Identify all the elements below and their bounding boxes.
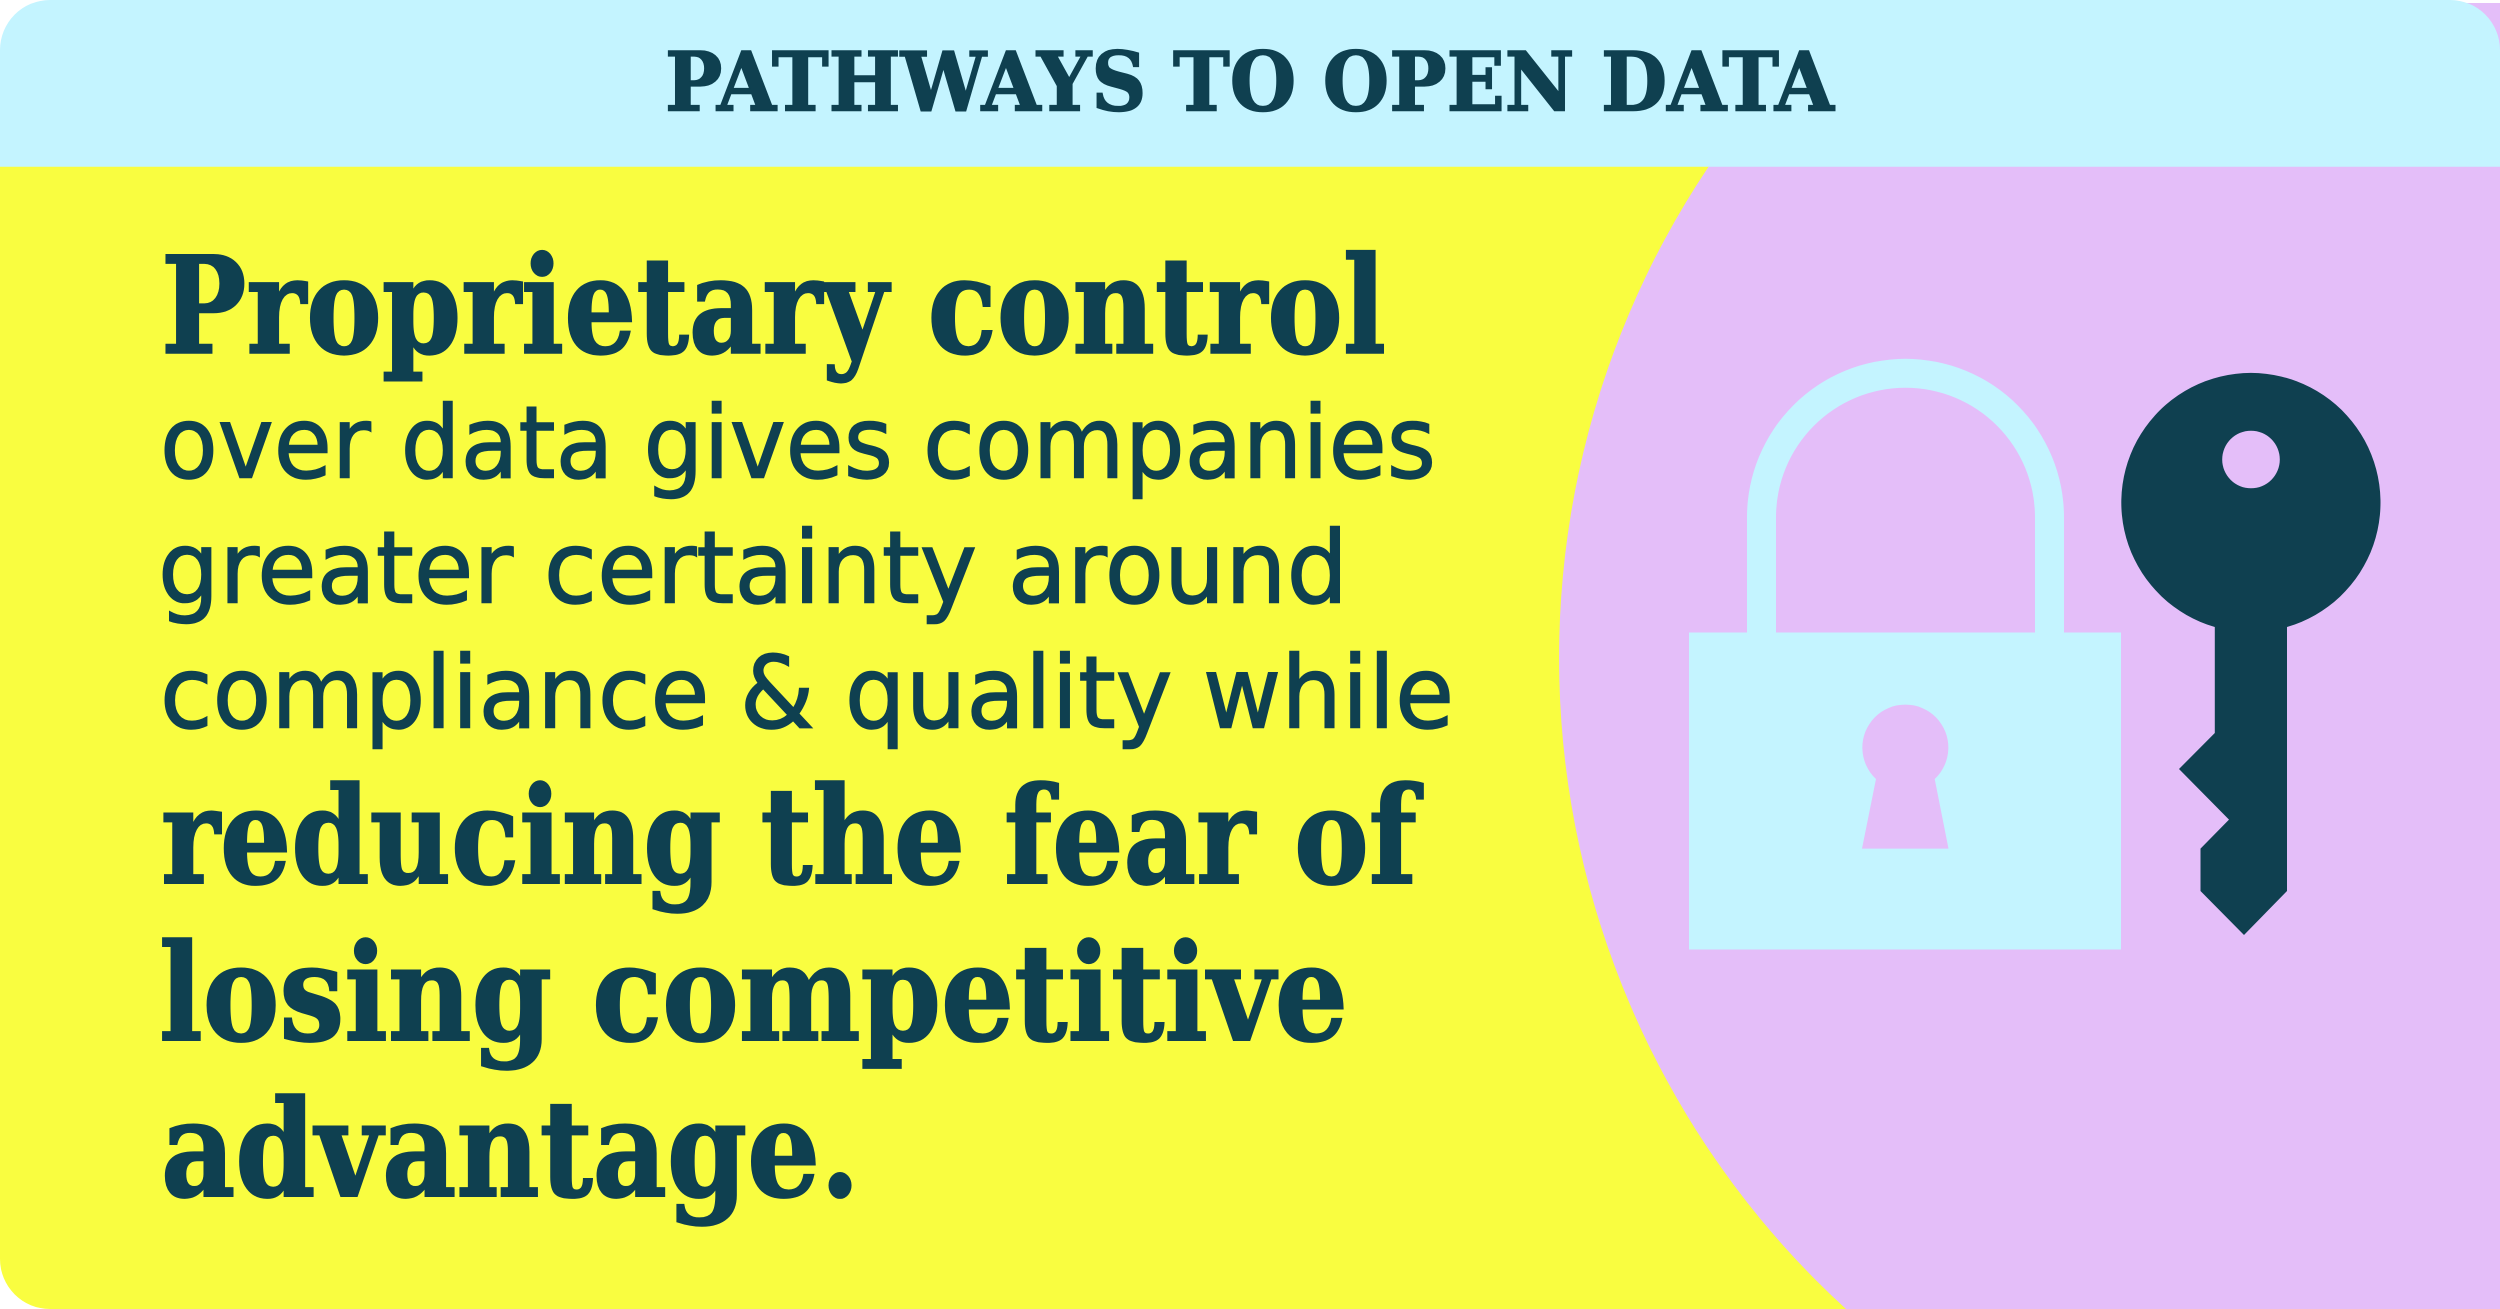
icon: padlock	[1689, 359, 2121, 949]
icon: key	[2121, 373, 2380, 935]
heading: proprietary control: Proprietary control	[161, 227, 1386, 385]
body line 3: compliance & quality while	[160, 635, 1454, 752]
emphasis line 3: advantage.	[161, 1070, 860, 1228]
panel: header band	[0, 0, 2500, 167]
panel: purple circle background	[1559, 3, 2500, 1309]
text block: main statement	[158, 227, 1454, 1228]
emphasis line 2: losing competitive	[159, 914, 1348, 1072]
emphasis line 1: reducing the fear of	[161, 757, 1423, 915]
body line 2: greater certainty around	[158, 510, 1348, 627]
title: PATHWAYS TO OPEN DATA	[665, 35, 1836, 131]
body line 1: over data gives companies	[160, 385, 1436, 502]
